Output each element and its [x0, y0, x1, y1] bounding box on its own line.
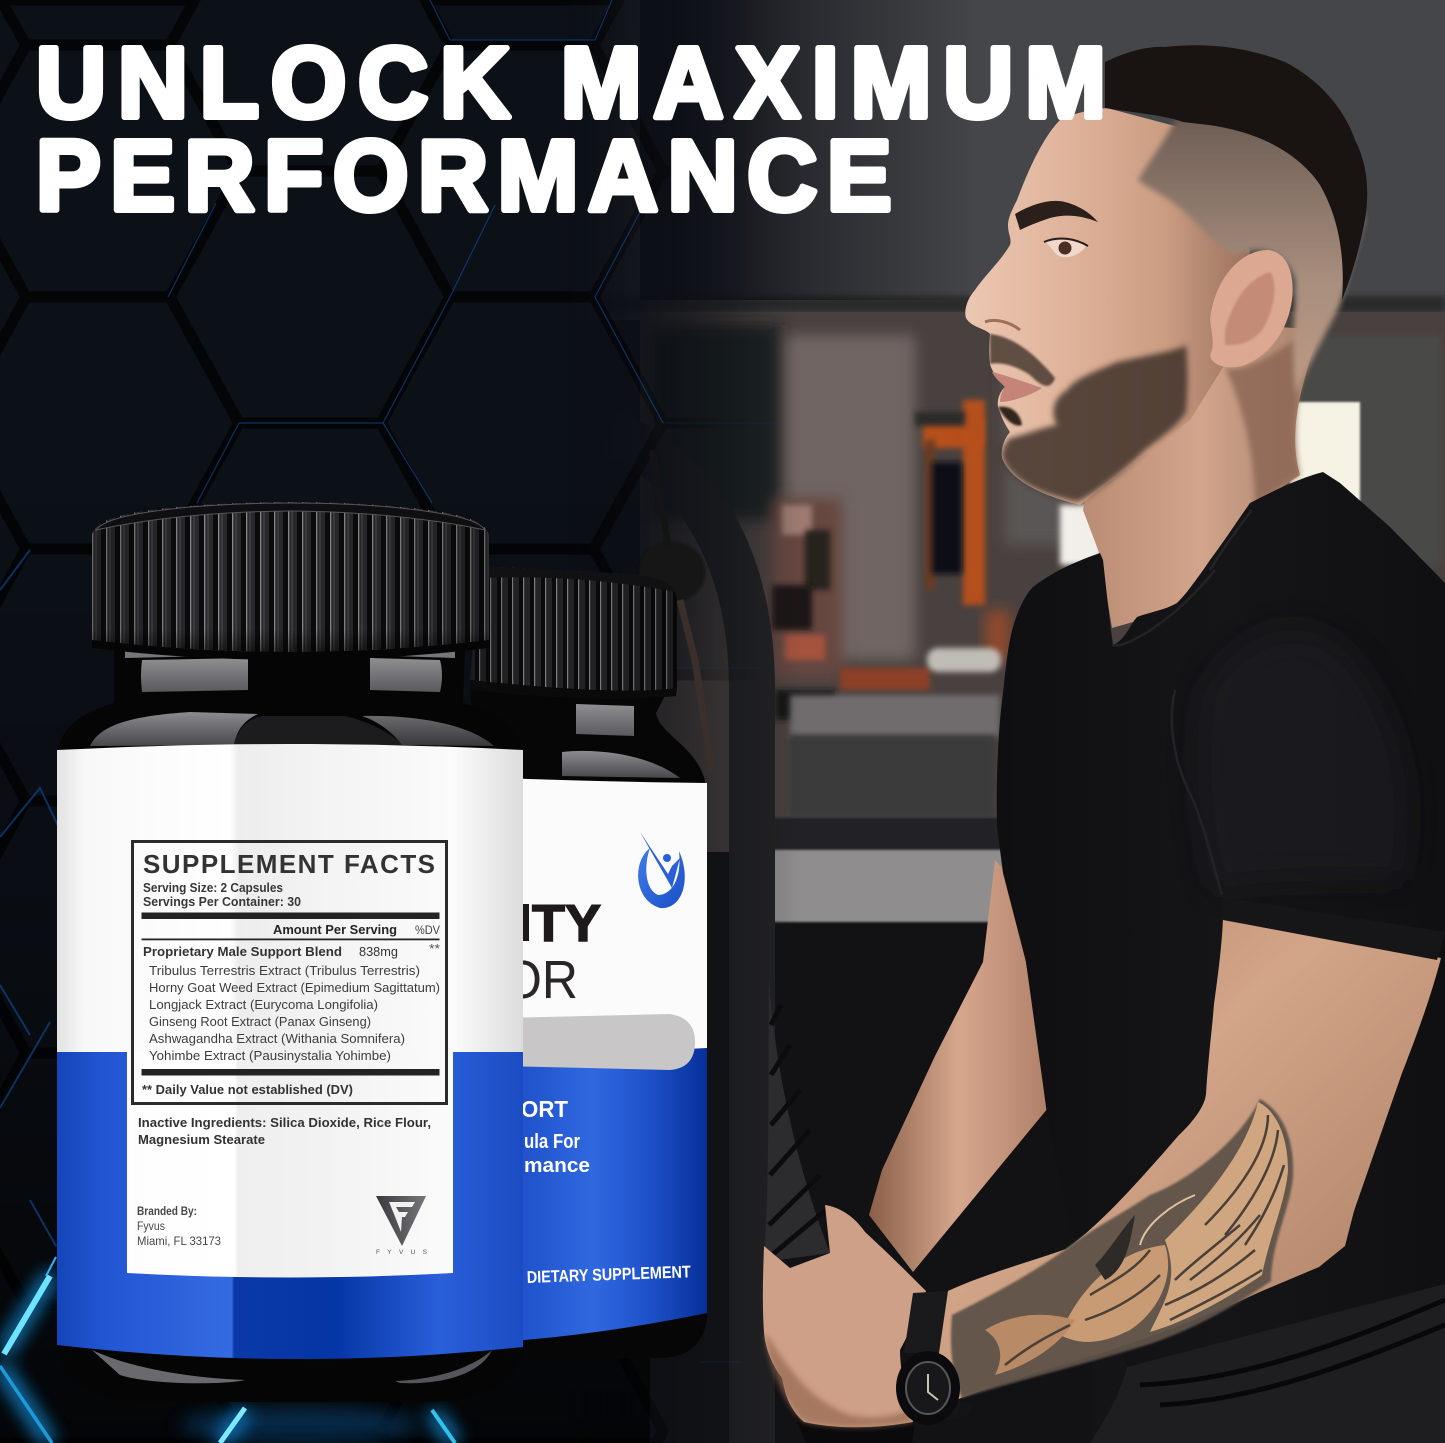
- trousers: [1090, 1284, 1445, 1443]
- tattoo: wing: [951, 1099, 1293, 1398]
- inactive ingredients: [138, 1115, 431, 1147]
- neck shadow: [1225, 330, 1310, 505]
- face: [965, 108, 1250, 505]
- inactive ingredients: Inactive Ingredients: Silica Dioxide, Rice Flour,: [138, 1115, 431, 1130]
- background: neon lines: [0, 1257, 455, 1443]
- lips: [992, 372, 1042, 402]
- ingredient list: Longjack Extract (Eurycoma Longifolia): [149, 998, 378, 1012]
- shirt sleeve highlight: [1198, 629, 1408, 890]
- gym equipment: handle and cable: [639, 450, 712, 770]
- neck: [1083, 320, 1320, 628]
- ear: [1210, 250, 1293, 367]
- thick rule: [142, 912, 440, 919]
- thin rule: [142, 938, 440, 940]
- background: thin blue hexagon accents: [0, 0, 780, 1362]
- FYVUS logo: [376, 1196, 428, 1256]
- back bottle: product name: [503, 895, 601, 1010]
- column headers: %DV: [415, 923, 440, 937]
- man: [763, 45, 1445, 1443]
- column headers: Amount Per Serving: [273, 922, 397, 937]
- front bottle: neck highlights: [125, 647, 455, 692]
- front bottle: white panel: [127, 1052, 453, 1278]
- ingredient list: Yohimbe Extract (Pausinystalia Yohimbe): [149, 1049, 391, 1063]
- branded by: [137, 1204, 221, 1248]
- gym equipment: curved black pipe: [610, 432, 752, 1443]
- hair: [1105, 45, 1367, 300]
- branded by: Fyvus: [137, 1219, 165, 1233]
- back bottle: neck highlight: [576, 704, 634, 736]
- serving info: Serving Size: 2 Capsules: [143, 881, 283, 895]
- sleeve cuff: [1222, 897, 1445, 960]
- ingredient list: [149, 964, 440, 1063]
- FYVUS logo: FYVUS: [376, 1249, 428, 1256]
- supplement facts panel: [132, 842, 446, 1104]
- hand gripping rope: [763, 1205, 926, 1427]
- blend row: Proprietary Male Support Blend: [143, 945, 342, 959]
- gym: orange rack: [915, 400, 985, 605]
- back bottle: benefit text: [521, 1096, 692, 1287]
- inactive ingredients: Magnesium Stearate: [138, 1132, 265, 1147]
- front bottle: bottom highlights: [92, 1350, 492, 1383]
- back bottle: benefit text: ORT: [521, 1096, 568, 1122]
- front bottle: glass body: [57, 650, 523, 1402]
- hair fade: [1138, 118, 1365, 395]
- daily value note: ** Daily Value not established (DV): [142, 1082, 353, 1097]
- thick rule: [142, 1069, 440, 1076]
- supplement facts heading: SUPPLEMENT FACTS: [143, 849, 435, 879]
- back bottle: product name: OR: [503, 950, 578, 1010]
- background: dark fade across the top: [640, 0, 980, 300]
- serving info: [143, 881, 301, 909]
- far arm: [869, 860, 1048, 1272]
- back bottle: logo: [638, 832, 685, 908]
- back bottle: shoulder highlight: [562, 751, 680, 778]
- back bottle: blue label: [500, 1048, 707, 1342]
- ingredient list: Ashwagandha Extract (Withania Somnifera): [149, 1032, 405, 1046]
- hand shading: [764, 1332, 913, 1427]
- ingredient list: Tribulus Terrestris Extract (Tribulus Terrestris): [149, 964, 420, 978]
- beard: [1002, 345, 1188, 502]
- title: [36, 27, 1106, 231]
- shirt seams: [1112, 510, 1252, 895]
- back bottle: [470, 566, 707, 1360]
- front bottle: [57, 502, 523, 1402]
- moustache: [990, 334, 1055, 386]
- back bottle: benefit text: mance: [524, 1155, 590, 1177]
- front bottle: blue label band: [57, 1052, 523, 1359]
- back bottle: glass: [470, 680, 707, 1360]
- blend row: 838mg: [359, 945, 398, 959]
- title: PERFORMANCE: [36, 120, 892, 231]
- wristwatch: [896, 1291, 972, 1425]
- ingredient list: Ginseng Root Extract (Panax Ginseng): [149, 1015, 371, 1029]
- branded by: Miami, FL 33173: [137, 1234, 221, 1248]
- blend row: **: [429, 942, 440, 956]
- back bottle: product name: TY: [532, 895, 601, 953]
- gym: dumbbell rack: [772, 498, 842, 720]
- eye: [1044, 239, 1088, 257]
- nostril: [985, 320, 1020, 330]
- background: honeycomb pattern: [0, 0, 728, 1437]
- back bottle: cap: [470, 566, 677, 699]
- blend row: [143, 942, 440, 959]
- front bottle: white label band: [57, 744, 523, 1056]
- torso in black t-shirt: [997, 472, 1445, 1367]
- serving info: Servings Per Container: 30: [143, 895, 301, 909]
- back bottle: benefit text: ula For: [524, 1131, 580, 1153]
- back bottle: grey pill: [500, 1014, 695, 1070]
- background: darker toward the bottom: [0, 500, 650, 1443]
- title: UNLOCK MAXIMUM: [36, 27, 1106, 138]
- soul patch: [998, 407, 1022, 426]
- eyebrow: [1015, 201, 1098, 230]
- back bottle: benefit text: DIETARY SUPPLEMENT: [526, 1262, 692, 1287]
- background: dark fade on the left: [0, 0, 800, 1443]
- battle rope: [764, 976, 915, 1443]
- front bottle: cap: [92, 502, 489, 660]
- ingredient list: Horny Goat Weed Extract (Epimedium Sagittatum): [149, 981, 440, 995]
- near arm: [915, 918, 1441, 1420]
- front bottle: shoulder highlights: [90, 712, 494, 746]
- branded by: Branded By:: [137, 1204, 197, 1218]
- back bottle: white label: [500, 778, 707, 1060]
